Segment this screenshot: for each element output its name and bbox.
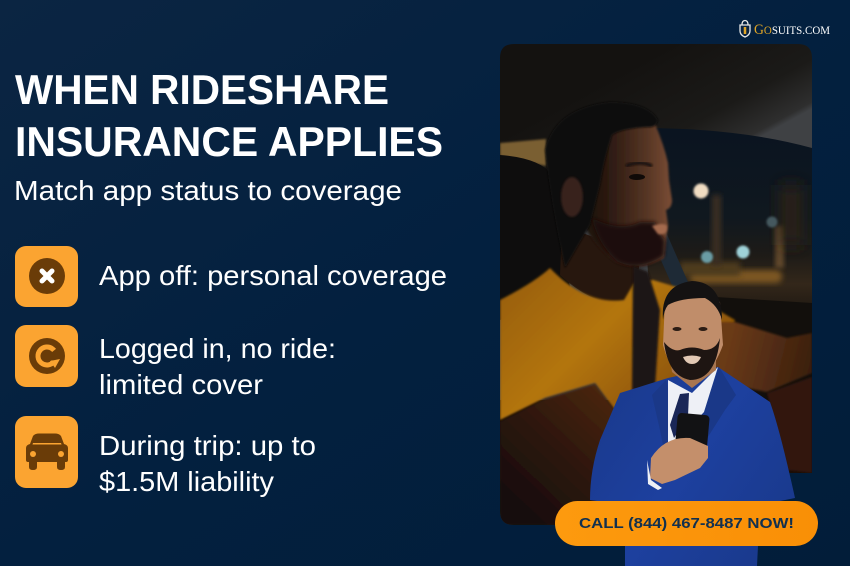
lapels	[652, 367, 736, 470]
left arm	[500, 383, 614, 524]
face	[586, 124, 674, 266]
eyebrow	[626, 163, 652, 166]
title: WHEN RIDESHARE	[15, 66, 389, 113]
driver	[500, 102, 812, 525]
eye	[629, 174, 645, 180]
car ceiling	[500, 44, 812, 525]
hair	[545, 102, 658, 268]
item text: logged in: Logged in, no ride:	[99, 333, 336, 364]
dashboard	[718, 297, 812, 400]
beard	[592, 218, 665, 266]
item: during trip	[15, 416, 316, 497]
shirt	[500, 267, 736, 421]
logo	[740, 20, 830, 38]
icon: cancel circle	[15, 246, 78, 307]
icon: circular arrow	[15, 325, 78, 387]
item: app off	[15, 246, 447, 307]
lawyer portrait	[590, 281, 795, 566]
neck and head	[663, 281, 723, 388]
ear	[561, 177, 583, 217]
seat	[500, 155, 572, 320]
item text: app off: App off: personal coverage	[99, 260, 447, 291]
hand	[650, 438, 708, 484]
lips	[652, 224, 667, 234]
item: logged in	[15, 325, 336, 400]
windshield pillar	[661, 234, 688, 287]
side window light	[500, 139, 546, 166]
lower dark interior	[500, 400, 614, 525]
phone	[674, 413, 710, 457]
shirt cuff	[647, 460, 662, 490]
item text: logged in: limited cover	[99, 369, 263, 400]
call to action button: CALL (844) 467-8487 NOW!	[579, 516, 794, 532]
right arm	[705, 322, 812, 392]
logo wordmark: GOSUITS.COM	[754, 22, 830, 38]
suit	[590, 367, 795, 566]
seat belt	[632, 266, 660, 392]
item text: during trip: $1.5M liability	[99, 466, 274, 497]
neck	[560, 234, 639, 302]
panel: driver photo	[500, 44, 812, 525]
item text: during trip: During trip: up to	[99, 430, 316, 461]
windshield night view	[640, 128, 812, 310]
title: INSURANCE APPLIES	[15, 118, 443, 165]
subtitle: Match app status to coverage	[14, 175, 402, 206]
call to action button	[555, 501, 818, 546]
icon: lock shield	[740, 20, 750, 37]
shirt and tie	[668, 367, 718, 450]
icon: car	[15, 416, 78, 488]
